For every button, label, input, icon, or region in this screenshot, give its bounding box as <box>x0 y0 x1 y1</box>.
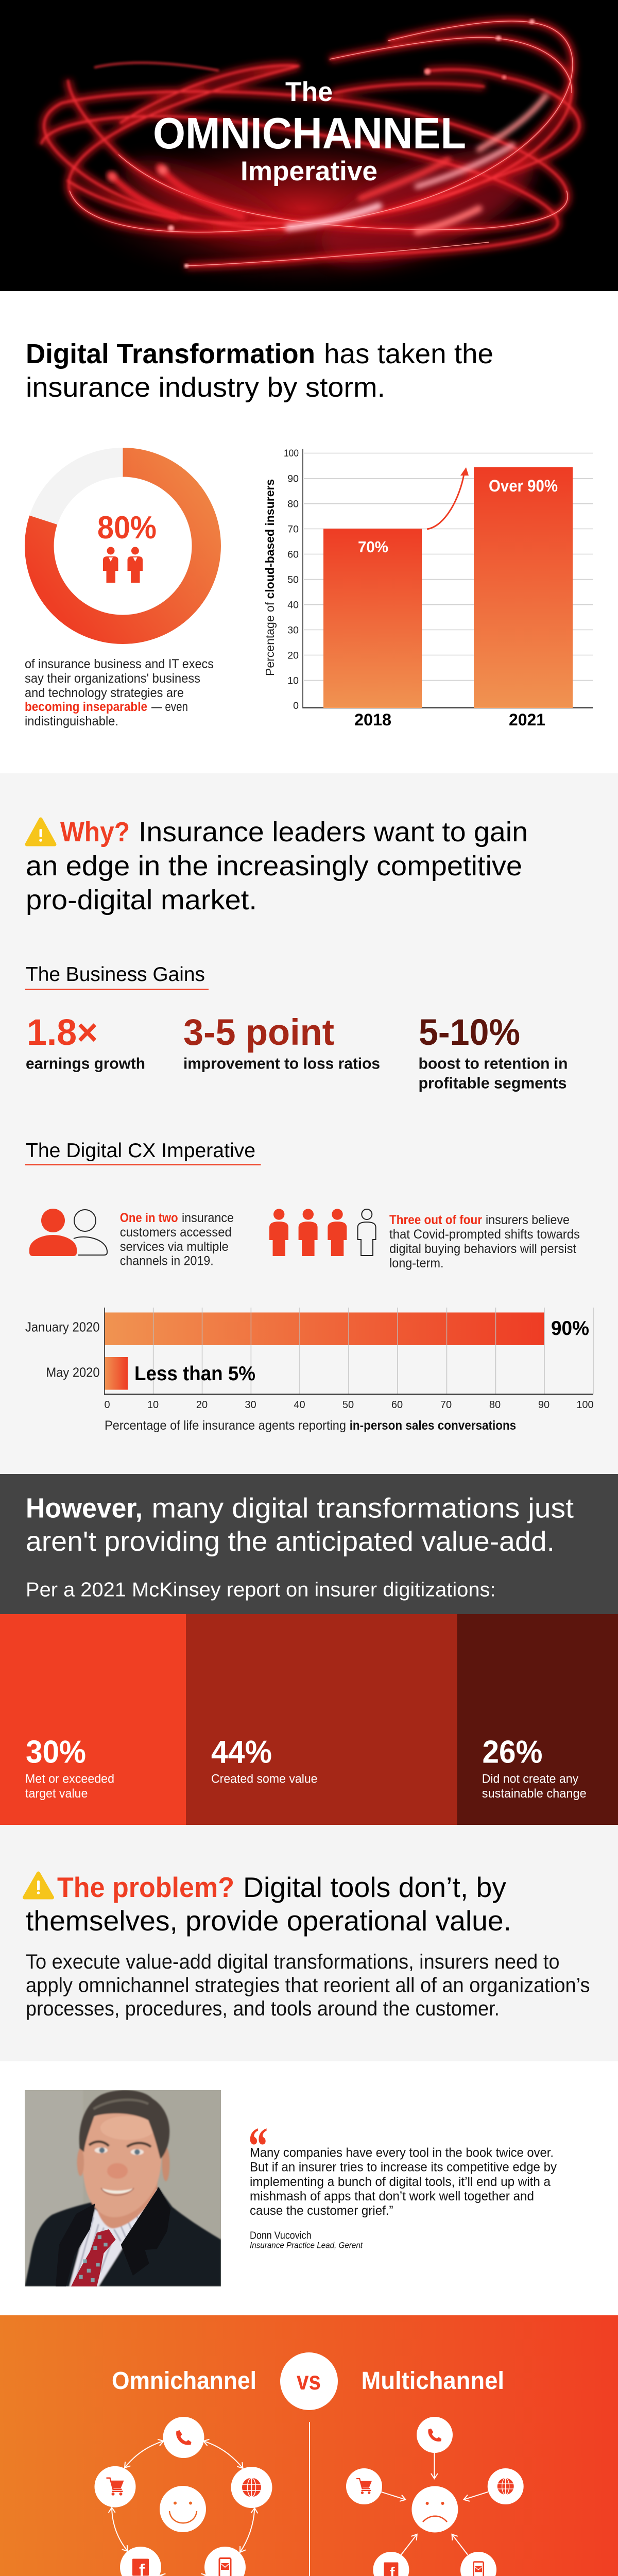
panel: 44% created some value: Created some value <box>211 1772 317 1786</box>
bar: 2018: 2018 <box>354 710 391 729</box>
bar: 2021: 2021 <box>509 710 545 729</box>
illustration: red light swirl <box>41 19 579 294</box>
heading: omnichannel: Omnichannel <box>112 2367 256 2395</box>
text: donut caption: say their organizations' business <box>25 671 200 686</box>
stat: retention: boost to retention in <box>418 1054 568 1073</box>
text: donut caption <box>25 657 214 728</box>
y axis ticks: 80 <box>287 499 299 510</box>
chart: in-person sales conversations <box>25 1308 594 1433</box>
text: quote: implementing a bunch of digital tools, it’ll end up with a <box>250 2175 551 2189</box>
icon: facebook <box>373 2552 409 2576</box>
text: quote: mishmash of apps that don’t work well together and <box>250 2189 534 2204</box>
text: three out of four <box>389 1213 580 1270</box>
panel: the problem section background <box>0 1825 618 2061</box>
category labels: May 2020 <box>46 1364 100 1380</box>
title: Imperative <box>241 156 377 187</box>
heading: the problem: Digital tools don’t, by <box>243 1871 506 1903</box>
icon: two executives <box>103 547 143 583</box>
stat: loss ratios: 3-5 point <box>183 1012 334 1053</box>
heading: why: Why? <box>60 817 130 848</box>
value: less than 5%: Less than 5% <box>134 1363 255 1385</box>
x axis ticks: 90 <box>538 1399 550 1411</box>
text: quote: But if an insurer tries to increase its competitive edge by <box>250 2160 557 2174</box>
heading: the problem <box>26 1871 511 1937</box>
panel: 30% met or exceeded: Met or exceeded <box>25 1772 114 1786</box>
arrow: growth <box>427 467 469 529</box>
y axis ticks <box>284 448 299 711</box>
panel: 30% met or exceeded <box>0 1614 186 1825</box>
y axis ticks: 100 <box>284 448 299 459</box>
text: mckinsey report: Per a 2021 McKinsey report on insurer digitizations: <box>26 1579 495 1601</box>
text: one in two: customers accessed <box>120 1225 232 1240</box>
text: three out of four: Three out of four <box>389 1213 482 1227</box>
y axis ticks: 0 <box>293 700 299 711</box>
bar: 2018 <box>323 529 422 729</box>
text: donut caption: of insurance business and IT execs <box>25 657 214 671</box>
subheading: the business gains: The Business Gains <box>26 963 205 986</box>
icon: phone <box>163 2417 204 2458</box>
y axis ticks: 30 <box>287 624 299 636</box>
heading: digital transformation <box>26 338 493 403</box>
icon: tablet email <box>460 2552 496 2576</box>
diagram: multichannel <box>346 2417 524 2576</box>
x axis title: Percentage of life insurance agents reporting <box>105 1418 346 1433</box>
text: omnichannel strategies <box>26 1951 590 2020</box>
text: donut caption: indistinguishable. <box>25 714 118 728</box>
x axis ticks <box>104 1399 594 1411</box>
heading: digital transformation: insurance industry by storm. <box>26 372 385 403</box>
icon: warning triangle <box>27 819 55 844</box>
y axis ticks: 70 <box>287 523 299 535</box>
panel: 26% no sustainable change: 26% <box>482 1734 543 1770</box>
stat: loss ratios <box>183 1012 380 1073</box>
photo: donn vucovich portrait <box>25 2090 221 2286</box>
bar: 2018: 70% <box>358 538 388 556</box>
heading: why <box>26 817 528 916</box>
panel: 26% no sustainable change <box>457 1614 618 1825</box>
x axis ticks: 40 <box>294 1399 305 1411</box>
heading: the problem: themselves, provide operational value. <box>26 1905 511 1937</box>
stat: loss ratios: improvement to loss ratios <box>183 1054 380 1073</box>
stat: retention: profitable segments <box>418 1074 566 1092</box>
stat: earnings growth: earnings growth <box>26 1054 145 1073</box>
y axis ticks: 50 <box>287 574 299 585</box>
heading: however <box>26 1493 574 1557</box>
heading: however: many digital transformations just <box>151 1493 574 1524</box>
x axis ticks: 100 <box>576 1399 594 1411</box>
x axis title <box>105 1418 516 1433</box>
bar: january 2020 <box>105 1313 544 1345</box>
heading: digital transformation: Digital Transformation <box>26 338 315 369</box>
stat: earnings growth: 1.8× <box>27 1012 98 1053</box>
icon: cart <box>95 2466 136 2507</box>
heading: why: pro-digital market. <box>26 885 257 916</box>
panel: omnichannel vs multichannel <box>0 2315 618 2576</box>
panel: 30% met or exceeded: target value <box>25 1787 88 1801</box>
heading: multichannel: Multichannel <box>362 2367 504 2395</box>
text: one in two: insurance <box>182 1211 234 1225</box>
x axis ticks: 30 <box>245 1399 256 1411</box>
panel: however section <box>0 1474 618 1614</box>
subheading: the digital cx imperative: The Digital CX Imperative <box>26 1140 255 1162</box>
text: attribution <box>250 2230 363 2250</box>
bar: 2021 <box>474 467 573 729</box>
y axis ticks: 90 <box>287 473 299 484</box>
icon: cart <box>346 2468 382 2504</box>
x axis ticks: 80 <box>489 1399 501 1411</box>
y axis ticks: 10 <box>287 675 299 686</box>
y axis ticks: 60 <box>287 549 299 561</box>
heading: why: Insurance leaders want to gain <box>139 817 528 848</box>
chart: 80% donut <box>25 448 221 644</box>
heading: however: However, <box>26 1493 143 1524</box>
title: OMNICHANNEL <box>153 109 466 158</box>
x axis ticks: 70 <box>440 1399 452 1411</box>
icon: phone <box>417 2417 453 2453</box>
panel: 44% created some value: 44% <box>211 1734 272 1770</box>
category labels <box>25 1319 100 1380</box>
bar: may 2020 <box>105 1357 128 1390</box>
text: omnichannel strategies: apply omnichannel strategies that reorient all of an organization’s <box>26 1974 590 1997</box>
icon: smiley <box>160 2486 206 2532</box>
panel: hero banner <box>0 0 618 294</box>
text: donut caption: becoming inseparable <box>25 700 147 714</box>
text: quote <box>250 2145 557 2218</box>
bar: 2021: Over 90% <box>489 477 558 495</box>
text: attribution: Donn Vucovich <box>250 2230 311 2241</box>
icon: quote mark: “ <box>248 2116 268 2176</box>
text: one in two: One in two <box>120 1211 178 1225</box>
stat: earnings growth <box>26 1012 145 1073</box>
panel: 26% no sustainable change: Did not create any <box>482 1772 578 1786</box>
x axis ticks: 10 <box>147 1399 159 1411</box>
y axis ticks: 20 <box>287 650 299 662</box>
y axis title: Percentage of cloud-based insurers <box>263 479 277 676</box>
x axis ticks: 60 <box>391 1399 403 1411</box>
chart: cloud-based insurers bar chart <box>263 448 593 729</box>
text: three out of four: insurers believe <box>486 1213 570 1227</box>
y axis ticks: 40 <box>287 600 299 611</box>
stat: retention <box>418 1012 568 1092</box>
icon: facebook <box>120 2547 161 2576</box>
stat: 80%: 80% <box>97 510 157 546</box>
value: 90%: 90% <box>551 1317 589 1340</box>
stat: retention: 5-10% <box>419 1012 520 1053</box>
text: donut caption: — even <box>151 700 188 714</box>
icon: sad face <box>411 2486 458 2533</box>
panel: 26% no sustainable change: sustainable change <box>482 1787 587 1801</box>
text: quote: Many companies have every tool in the book twice over. <box>250 2145 554 2160</box>
text: three out of four: digital buying behaviors will persist <box>389 1242 576 1256</box>
heading: digital transformation: has taken the <box>324 338 493 369</box>
heading: the problem: The problem? <box>57 1871 234 1903</box>
text: quote: cause the customer grief.” <box>250 2204 393 2218</box>
title <box>153 77 466 187</box>
text: one in two: channels in 2019. <box>120 1254 214 1268</box>
text: one in two: services via multiple <box>120 1240 229 1254</box>
diagram: omnichannel <box>95 2417 272 2576</box>
text: omnichannel strategies: processes, procedures, and tools around the customer. <box>26 1997 500 2020</box>
heading: why: an edge in the increasingly competitive <box>26 851 522 882</box>
x axis title: in-person sales conversations <box>350 1418 516 1433</box>
icon: three of four people <box>269 1209 376 1256</box>
icon: warning triangle <box>25 1873 53 1897</box>
x axis ticks: 50 <box>342 1399 354 1411</box>
panel: why section background <box>0 773 618 1474</box>
heading: however: aren't providing the anticipated value-add. <box>26 1526 555 1557</box>
title: The <box>285 77 333 107</box>
panel: 30% met or exceeded: 30% <box>26 1734 86 1770</box>
x axis ticks: 0 <box>104 1399 110 1411</box>
category labels: January 2020 <box>25 1319 100 1334</box>
text: omnichannel strategies: To execute value-add digital transformations, insurers need to <box>26 1951 559 1973</box>
panel: 44% created some value <box>186 1614 457 1825</box>
icon: globe <box>231 2467 272 2508</box>
text: attribution: Insurance Practice Lead, Gerent <box>250 2240 363 2250</box>
text: one in two <box>120 1211 234 1268</box>
text: three out of four: that Covid-prompted shifts towards <box>389 1227 580 1242</box>
x axis ticks: 20 <box>196 1399 208 1411</box>
icon: one in two people <box>29 1209 107 1256</box>
badge: vs <box>280 2352 338 2410</box>
text: donut caption: and technology strategies are <box>25 686 184 700</box>
icon: tablet email <box>204 2547 246 2576</box>
badge: vs: vs <box>297 2366 321 2395</box>
icon: globe <box>488 2468 524 2504</box>
text: three out of four: long-term. <box>389 1256 444 1270</box>
